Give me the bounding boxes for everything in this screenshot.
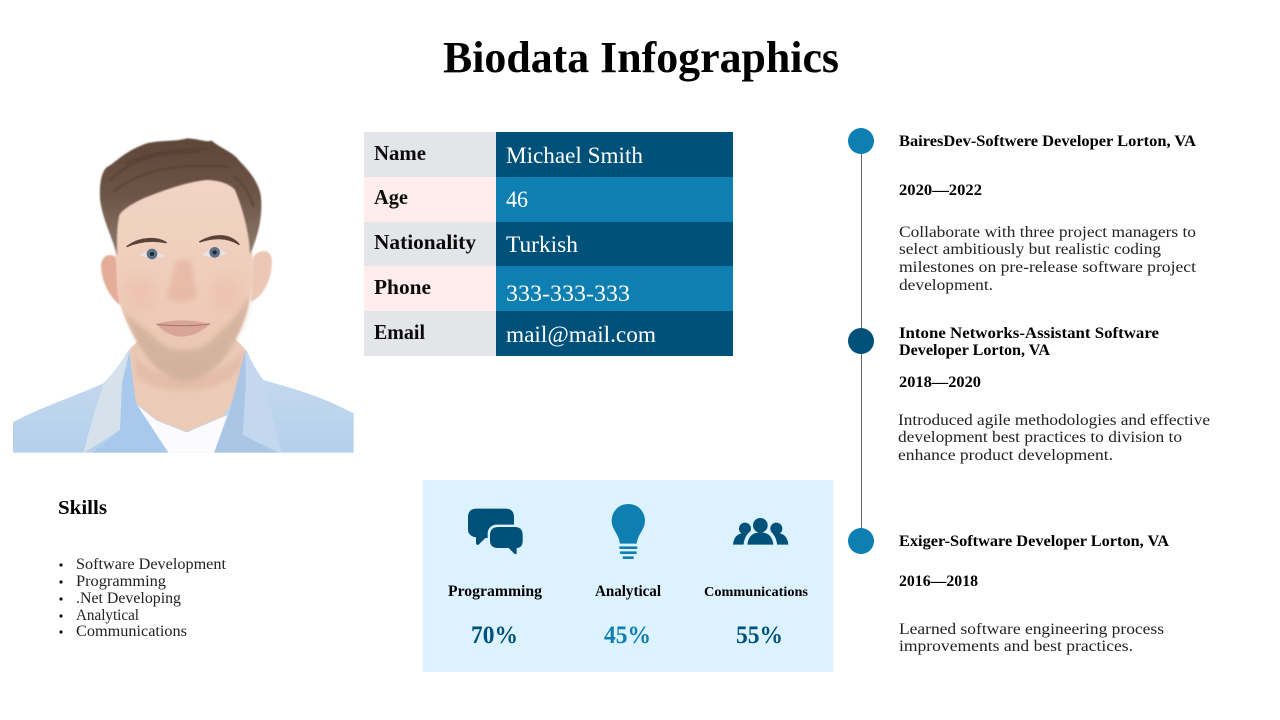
skill labels	[448, 583, 809, 600]
experience 1	[899, 133, 1197, 294]
stubble	[124, 293, 250, 382]
skills list: Analytical	[76, 607, 140, 624]
collar right	[213, 350, 282, 455]
neck	[130, 333, 246, 432]
undershirt	[135, 403, 227, 455]
experience 2: development best practices to division to	[898, 429, 1182, 446]
title: Biodata Infographics	[443, 33, 839, 82]
timeline axis	[848, 128, 874, 554]
ears	[101, 255, 121, 305]
biodata table: 333-333-333	[506, 281, 630, 306]
neck shadow	[136, 356, 242, 390]
experience 1: development.	[899, 277, 993, 294]
timeline dot 1	[848, 128, 874, 154]
eyes	[140, 252, 165, 258]
icon: people group	[733, 518, 788, 546]
experience 1: milestones on pre-release software project	[899, 259, 1197, 276]
experience 1: 2020—2022	[899, 182, 982, 199]
nose shading	[167, 260, 197, 302]
experience 2: enhance product development.	[898, 447, 1113, 464]
mouth	[157, 320, 210, 337]
cheek shading	[136, 286, 145, 298]
skill percentages: 70%	[471, 622, 518, 649]
experience 3: Learned software engineering process	[899, 621, 1164, 638]
experience 2: Introduced agile methodologies and effective	[898, 412, 1210, 429]
skills heading: Skills	[58, 497, 107, 519]
biodata table: Age	[374, 185, 408, 209]
skill labels: Analytical	[595, 583, 662, 600]
skills list	[59, 556, 227, 640]
biodata table: Name	[374, 141, 426, 165]
experience 3: 2016—2018	[899, 573, 978, 590]
face	[114, 179, 253, 342]
skills list: Communications	[76, 623, 187, 640]
collar left	[83, 351, 129, 453]
biodata table: Nationality	[374, 230, 476, 254]
timeline dot 3	[848, 528, 874, 554]
skill percentages	[471, 622, 783, 649]
experience 3: improvements and best practices.	[899, 638, 1133, 655]
biodata table: 46	[506, 187, 528, 212]
portrait photo	[10, 138, 357, 457]
skills list: Programming	[76, 573, 166, 590]
experience 2	[898, 325, 1210, 464]
experience 1: Collaborate with three project managers to	[899, 224, 1196, 241]
skill percentages: 55%	[736, 622, 783, 649]
experience 2: 2018—2020	[899, 374, 981, 391]
skills list: Software Development	[76, 556, 227, 573]
icon: speech bubbles	[468, 509, 525, 554]
experience 1: select ambitiously but realistic coding	[899, 241, 1161, 258]
experience 3: Exiger-Software Developer Lorton, VA	[899, 533, 1169, 550]
biodata table: Email	[374, 320, 425, 344]
biodata table: Phone	[374, 275, 431, 299]
eyebrows	[127, 239, 167, 247]
hair strands	[110, 148, 253, 207]
experience 1: BairesDev-Softwere Developer Lorton, VA	[899, 133, 1196, 150]
skills list: .Net Developing	[76, 590, 181, 607]
panel: skill percentages	[423, 480, 833, 672]
experience 2: Intone Networks-Assistant Software	[899, 325, 1159, 342]
icon: light bulb	[612, 504, 645, 559]
hair	[100, 138, 261, 255]
experience 3	[899, 533, 1169, 655]
experience 2: Developer Lorton, VA	[899, 342, 1050, 359]
biodata table: Turkish	[506, 232, 578, 257]
skill percentages: 45%	[604, 622, 651, 649]
biodata table: Michael Smith	[506, 143, 643, 168]
shirt	[10, 350, 357, 457]
timeline dot 2	[848, 328, 874, 354]
skill labels: Communications	[704, 585, 809, 600]
skill labels: Programming	[448, 583, 542, 600]
biodata table	[364, 132, 733, 356]
biodata table: mail@mail.com	[506, 322, 656, 347]
